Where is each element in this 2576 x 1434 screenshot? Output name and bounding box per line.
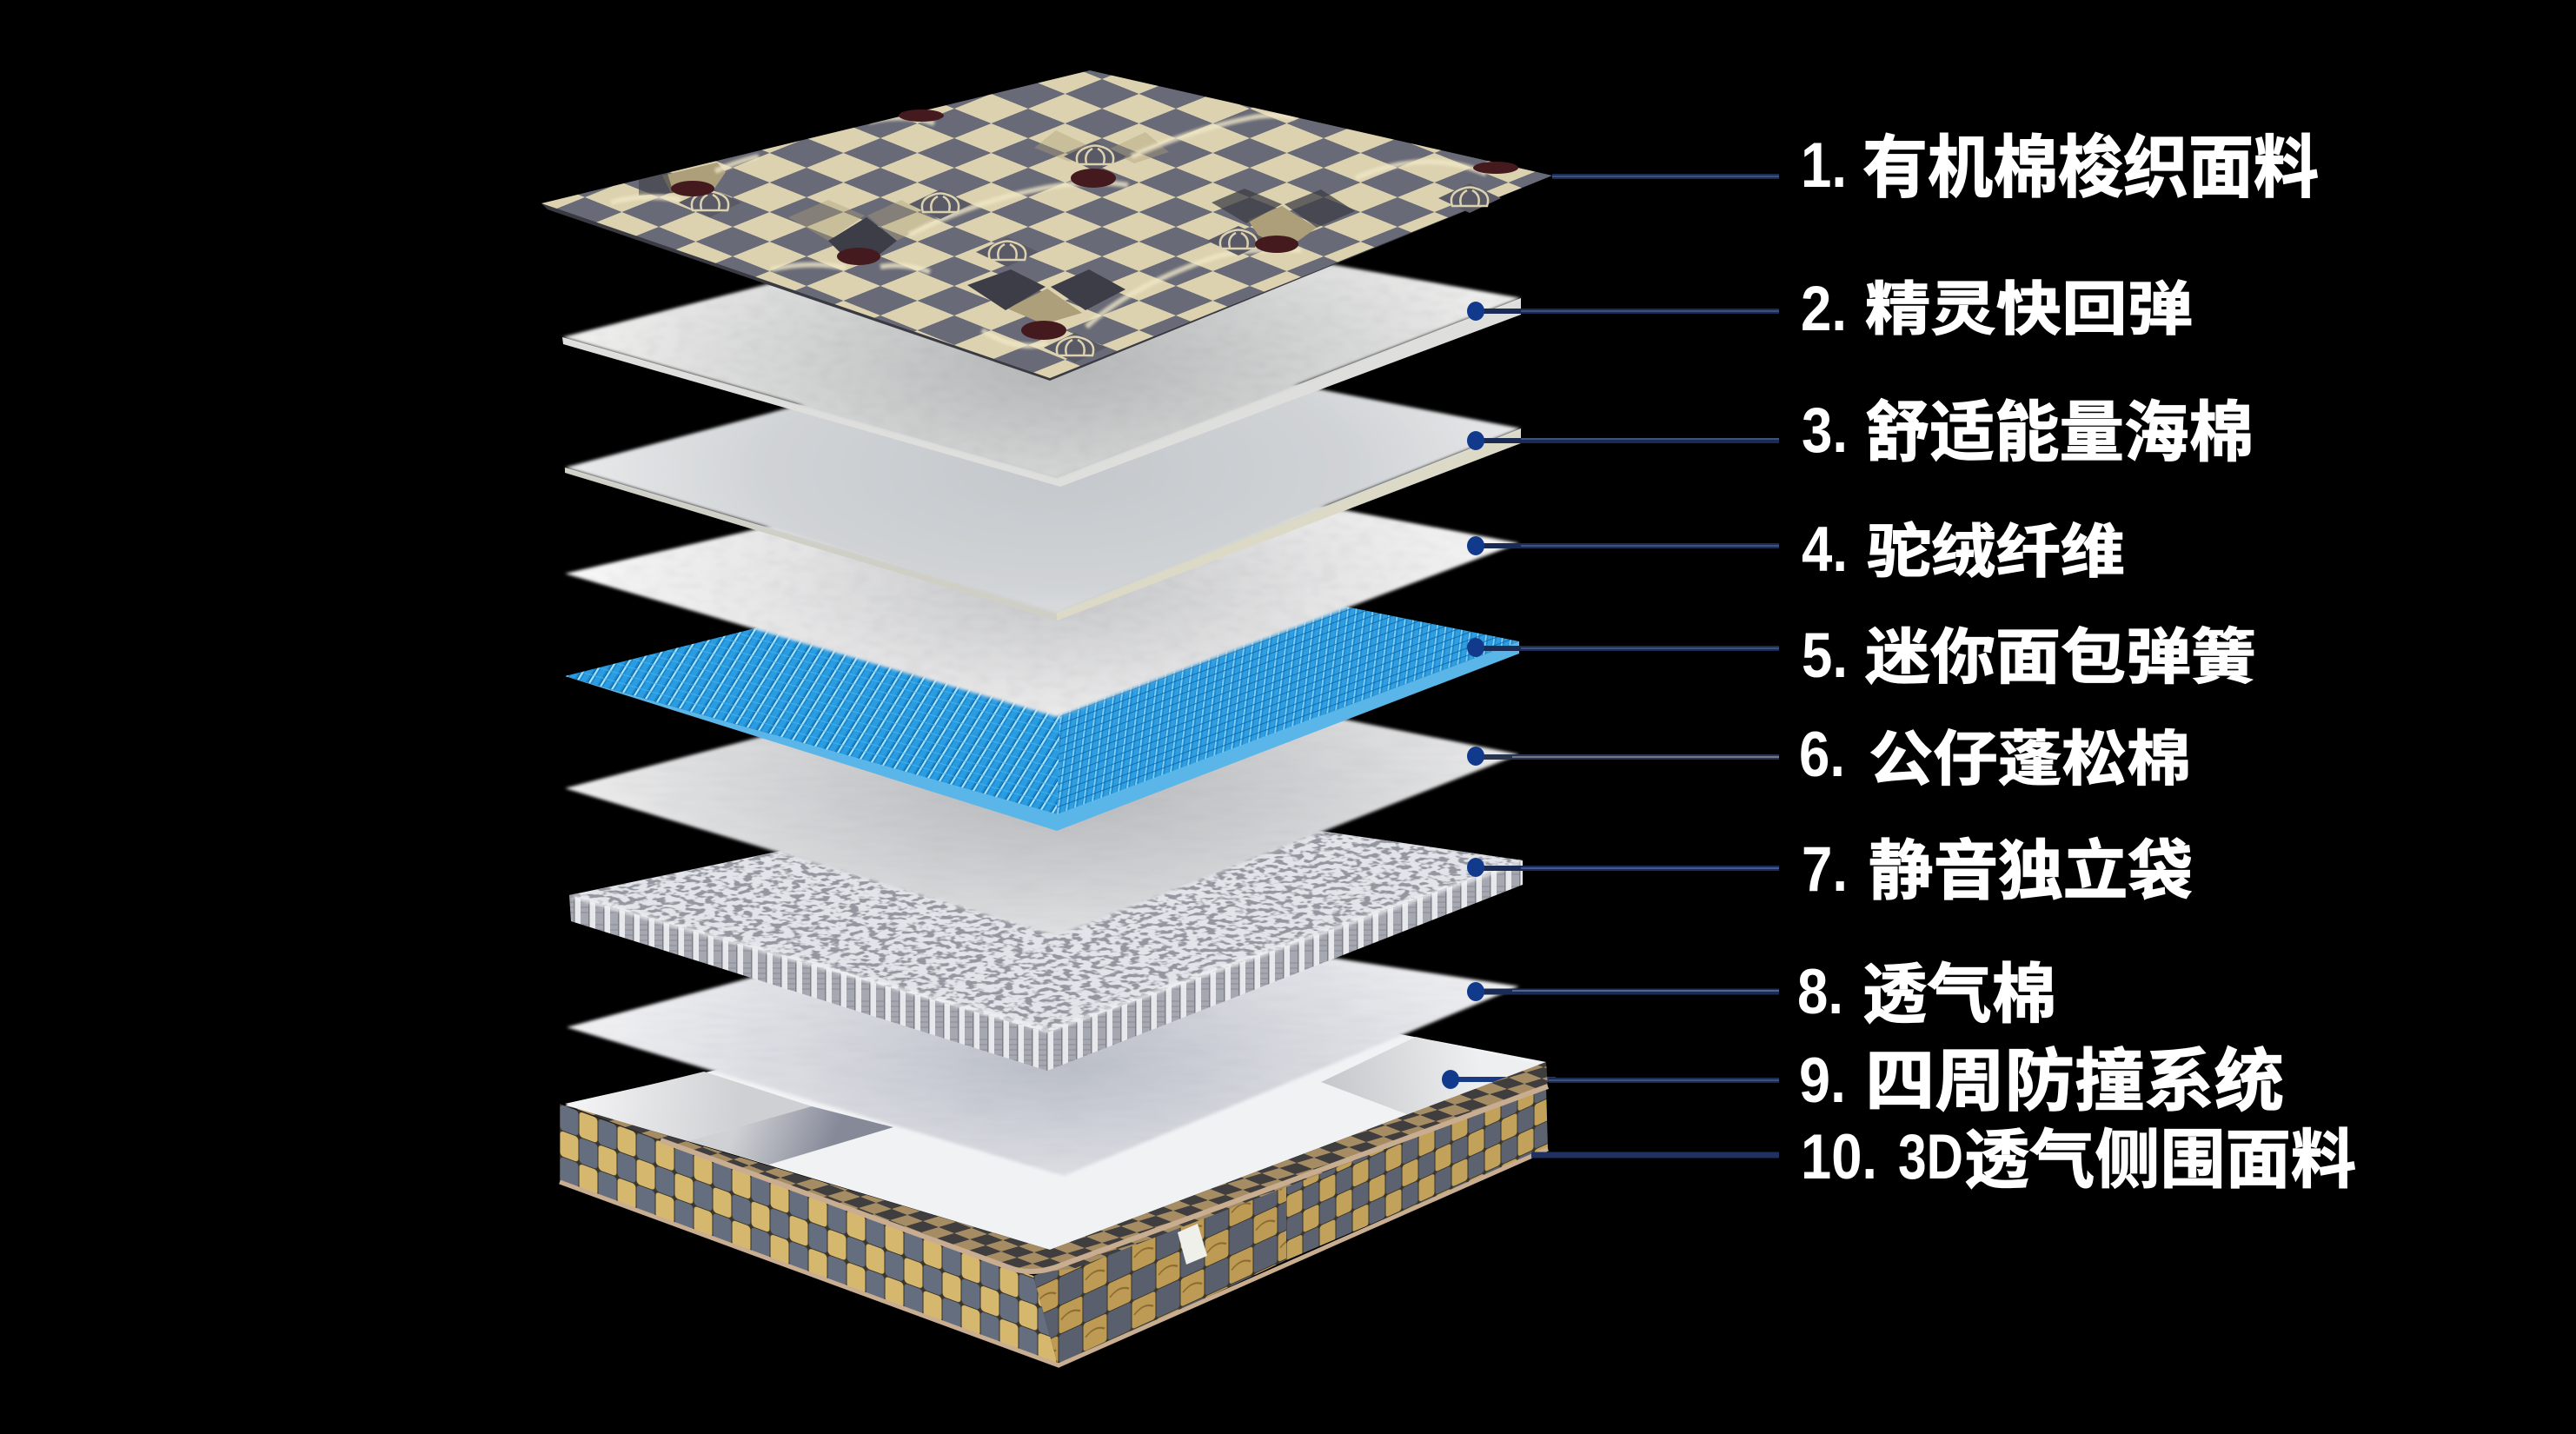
quilt crest highlights [611,116,1486,346]
marker dots [1467,302,1484,1001]
label 4: 4. [1802,515,1848,585]
label 7: 静音独立袋 [1869,835,2193,907]
layer 7: pocket spring unit [569,793,1523,1071]
label 9: 9. [1799,1046,1846,1116]
dark dimple diamonds [639,165,1355,310]
label 9: 四周防撞系统 [1865,1044,2284,1119]
blue foam surface: right half [1057,550,1519,814]
label 10 [1801,1122,2356,1196]
label 7: 7. [1802,834,1848,905]
checker surface [541,70,1552,378]
product tag [1178,1224,1207,1265]
label 1: 有机棉梭织面料 [1862,130,2319,206]
label 3: 3. [1802,395,1848,466]
foam edge [565,428,1521,621]
label 5: 5. [1802,621,1848,691]
leader 4 [1476,543,1779,548]
leader 7 [1476,866,1779,871]
label 2: 精灵快回弹 [1865,276,2193,342]
leader 2 [1476,309,1779,314]
tuft shading and dimples [611,116,1486,346]
tan dimple wedges [662,130,1317,324]
top border band [567,1062,1548,1274]
spring side columns [569,860,1523,1071]
blue foam side [565,641,1519,831]
label 6: 6. [1799,720,1845,790]
spring top texture [569,793,1523,1032]
mattress right side panel near the corner [1033,1182,1286,1367]
layer 8: breathable cotton sheet [567,908,1519,1176]
leader 1 [1552,174,1779,179]
mattress top: white interior [565,980,1546,1250]
fabric thin under-edge [541,176,1552,381]
leader 6 [1476,754,1779,760]
tuft buttons [671,110,1518,340]
label 8: 透气棉 [1862,959,2056,1031]
blue foam surface: left half [565,550,1066,814]
leader 9 [1549,1078,1779,1083]
white fringe along the spring edge [574,862,1521,1031]
interior shaded wells [565,1037,1538,1165]
layer 5: blue mini spring foam [565,550,1519,831]
label 1: 1. [1801,130,1847,201]
beige piping [560,1086,1548,1365]
label 10: 透气侧围面料 [1964,1124,2356,1196]
mattress left side panel [560,1104,1059,1367]
layer 1: organic cotton quilted fabric [541,70,1552,381]
leader lines to labels [1476,176,1779,1155]
foam surface [565,337,1521,613]
layer 4: camel fibre sheet [565,457,1519,717]
layer 6: cotton wadding sheet [565,661,1519,936]
label 2: 2. [1801,274,1847,344]
label 4: 驼绒纤维 [1867,519,2125,584]
leader 5 [1476,646,1779,651]
layer 2: quick rebound quilt layer [562,213,1521,487]
quilt edge [562,298,1521,487]
labels [1797,130,2356,1196]
quilt surface [562,213,1521,478]
leader 8 [1476,991,1779,992]
mattress base: layers 9 and 10 [560,980,1556,1367]
label 10: 3D [1898,1122,1963,1192]
label 5: 迷你面包弹簧 [1865,624,2256,691]
layer 3: comfort energy foam [565,337,1521,621]
label 10: 10. [1801,1122,1877,1192]
leader 3 [1476,439,1779,441]
label 6: 公仔蓬松棉 [1869,726,2191,793]
mattress right side panel far end [1286,1086,1548,1260]
crown logos [679,142,1501,362]
leader segment and dot: layer 9 [1442,1070,1556,1089]
leader 10 [1531,1152,1779,1158]
label 8: 8. [1797,957,1843,1027]
label 3: 舒适能量海棉 [1865,395,2254,469]
